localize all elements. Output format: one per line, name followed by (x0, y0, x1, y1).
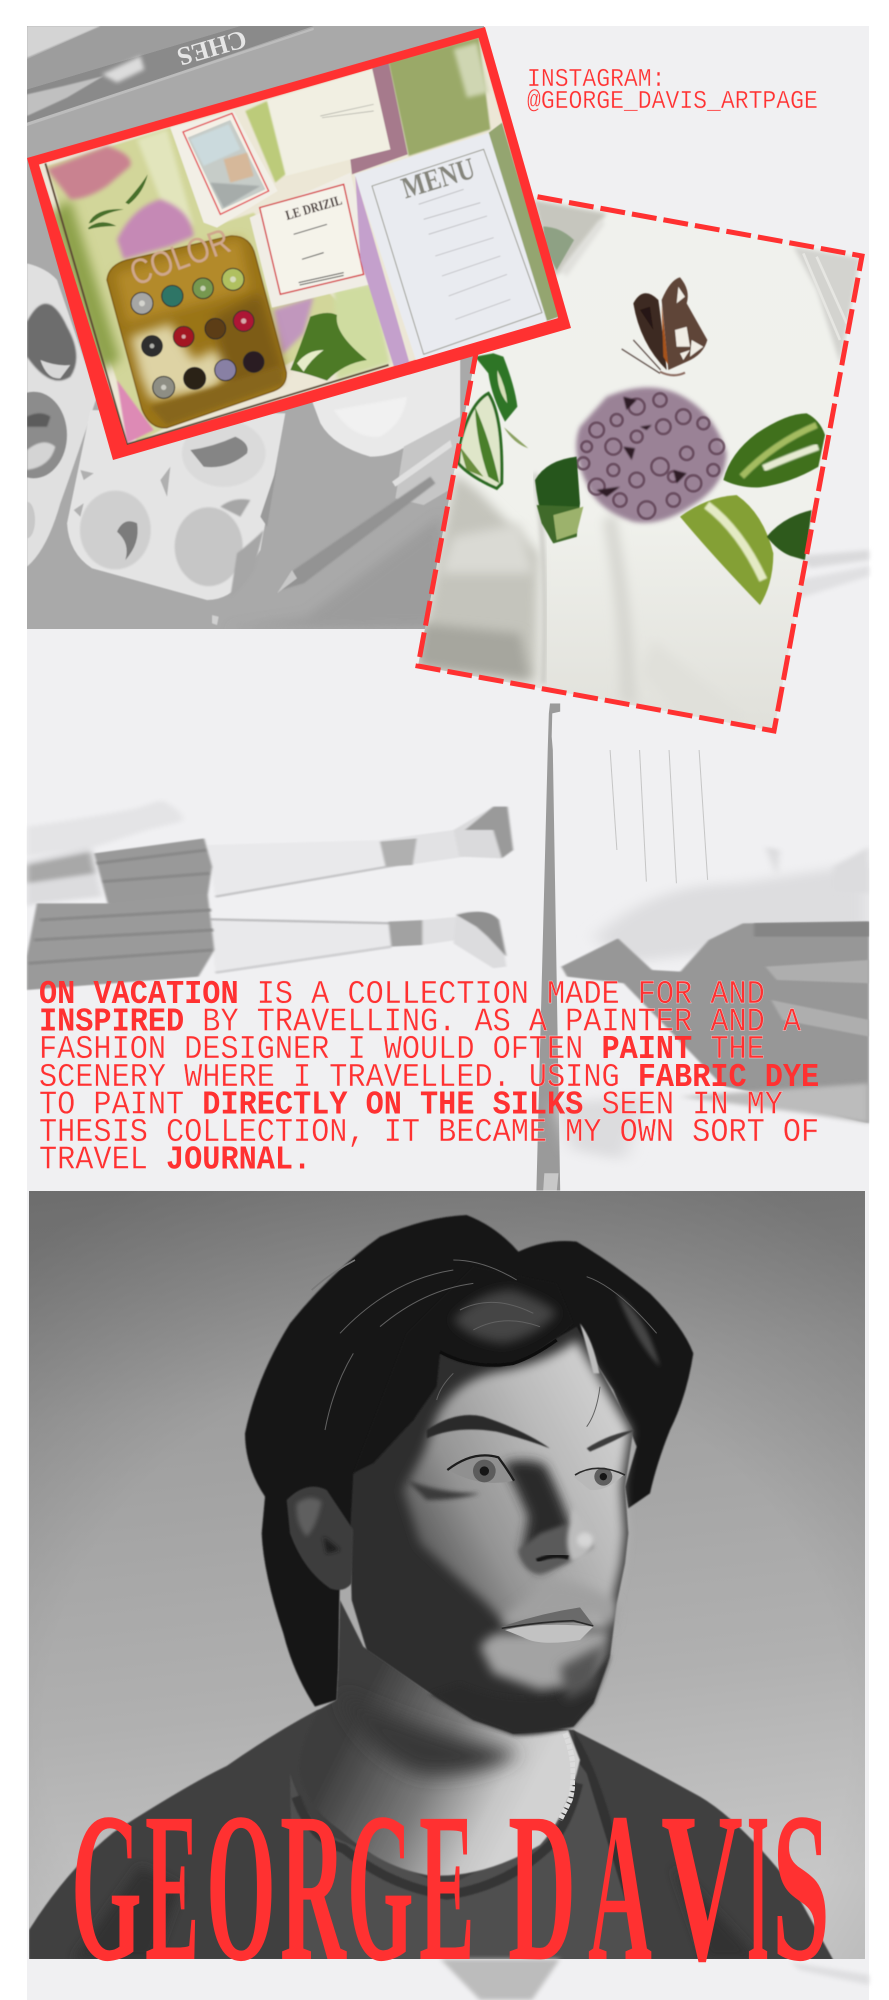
background photo: paint palettes (0, 24, 505, 629)
lit forehead and cheek (403, 1340, 630, 1630)
hydrangea (576, 387, 727, 523)
figure legs (207, 807, 513, 973)
name title: E (419, 1769, 475, 2000)
name title: S (772, 1769, 830, 2000)
black skirt (27, 838, 214, 990)
lower shoe (454, 911, 506, 968)
blank page (265, 69, 390, 176)
t-shirt (290, 1760, 643, 1960)
beard edge (430, 1655, 611, 1735)
instagram handle (527, 66, 818, 116)
name title (71, 1769, 830, 2000)
menu card: MENU (397, 150, 479, 205)
watercolor painting with solid red frame (27, 27, 571, 460)
body paragraph (39, 976, 819, 1179)
body paragraph: INSPIRED BY TRAVELLING. AS A PAINTER AND A (39, 1004, 801, 1041)
book spine (27, 24, 314, 126)
left eye (447, 1455, 514, 1483)
pink hydrangeas (47, 146, 131, 199)
green wash (389, 38, 490, 156)
upper right palette (310, 357, 460, 457)
name title: O (206, 1769, 276, 2000)
butterfly (622, 277, 707, 375)
body paragraph: ON VACATION IS A COLLECTION MADE FOR AND (39, 976, 765, 1013)
cardigan (29, 1710, 833, 1960)
right eye (573, 1468, 625, 1490)
portrait photo (29, 1191, 865, 1960)
inner border line (45, 163, 389, 444)
center palette (67, 410, 285, 600)
body paragraph: THESIS COLLECTION, IT BECAME MY OWN SORT OF (39, 1114, 819, 1151)
figure arm (27, 800, 182, 907)
left palette (27, 263, 96, 566)
upper shoe (454, 807, 513, 858)
eye socket and nose shadow (503, 1460, 573, 1573)
name title: G (347, 1769, 414, 2000)
instagram handle: INSTAGRAM: (527, 66, 665, 94)
center card: LE DRIZIL (284, 192, 344, 223)
upper left leaf (543, 227, 574, 270)
center card (250, 173, 377, 308)
collar (296, 1783, 578, 1895)
name title: R (280, 1769, 346, 2000)
photo: hand painted silk with dashed frame (418, 191, 862, 731)
color tray (107, 221, 286, 428)
paint bottles (131, 268, 264, 398)
dashed red frame (418, 191, 862, 731)
body paragraph: SCENERY WHERE I TRAVELLED. USING FABRIC DYE (39, 1059, 819, 1096)
hair highlights (312, 1260, 660, 1430)
lips (502, 1607, 593, 1643)
background photo: fashion sketch (27, 703, 869, 1191)
ear (287, 1487, 353, 1590)
center board edge (536, 703, 560, 1191)
instagram handle: @GEORGE_DAVIS_ARTPAGE (527, 88, 818, 116)
forehead hair fringe (353, 1267, 573, 1473)
name title: E (145, 1769, 199, 2000)
plant (290, 313, 367, 381)
strip below portrait (425, 1959, 869, 2000)
eyebrows (427, 1415, 550, 1448)
body paragraph: TO PAINT DIRECTLY ON THE SILKS SEEN IN MY (39, 1086, 783, 1124)
leaves (88, 174, 148, 229)
name title: D (508, 1769, 576, 2000)
pencil box (212, 417, 460, 629)
faint strokes right of the silk photo (788, 550, 869, 598)
paper (39, 38, 558, 445)
body paragraph: TRAVEL JOURNAL. (39, 1142, 311, 1179)
name title: V (661, 1769, 743, 2000)
silk cloth (425, 354, 806, 728)
necklace (560, 1733, 573, 1820)
thin vertical sketch lines (610, 750, 708, 883)
menu card (354, 123, 559, 366)
small card (170, 111, 278, 228)
body paragraph: FASHION DESIGNER I WOULD OFTEN PAINT THE (39, 1031, 765, 1069)
mustache and stubble (503, 1580, 617, 1627)
right leaves (723, 413, 825, 487)
name title: I (747, 1769, 769, 2000)
hair mass (245, 1215, 693, 1707)
nose (518, 1507, 594, 1573)
name title: A (588, 1769, 652, 2000)
studio backdrop (29, 1191, 865, 1959)
left side leaves (475, 353, 517, 422)
dark fabric strokes on the right (556, 847, 869, 1160)
neck (299, 1600, 580, 1876)
book spine: CHES (174, 24, 250, 72)
name title: G (71, 1769, 142, 2000)
color tray: COLOR (124, 221, 235, 293)
face shading base (350, 1327, 633, 1733)
red frame (27, 27, 571, 460)
